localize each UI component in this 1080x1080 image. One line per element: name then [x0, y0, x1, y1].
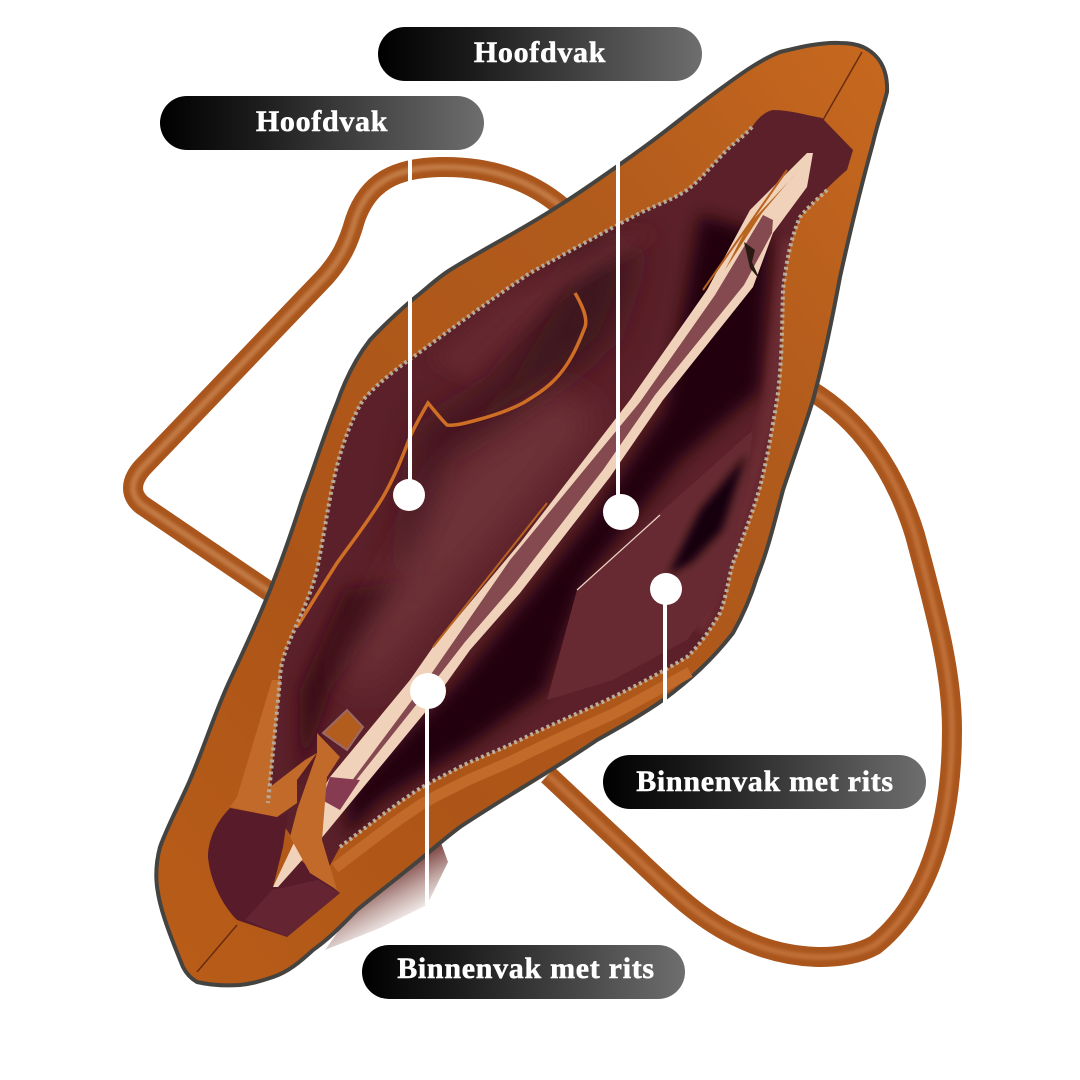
label: Binnenvak met rits bottom	[362, 945, 685, 999]
handle: left strap	[133, 167, 562, 592]
orange zipper tape bottom	[335, 672, 690, 868]
top zipper	[268, 127, 752, 803]
divider pale binding	[273, 153, 813, 887]
divider burgundy recess	[345, 215, 773, 790]
label: Hoofdvak top	[378, 27, 702, 81]
seam bottom left	[197, 925, 237, 972]
burgundy interior	[268, 110, 853, 880]
lining pocket flap	[245, 880, 340, 937]
front panel of the bag	[325, 840, 448, 950]
left pocket orange edge	[297, 293, 586, 627]
label: Binnenvak met rits bottom: Binnenvak met rits	[397, 952, 655, 985]
right zipper	[340, 190, 827, 847]
pointer: bottom zip pocket	[410, 673, 446, 905]
lining pocket bottom left	[208, 808, 340, 937]
pointer: top-centre compartment	[603, 155, 639, 530]
zip end	[322, 777, 360, 810]
orange piping	[433, 170, 787, 647]
pocket pale top edge	[577, 515, 660, 590]
pointer: right zip pocket	[650, 573, 682, 703]
small tab	[323, 710, 363, 750]
right inner zip pocket	[547, 430, 753, 700]
label: Binnenvak met rits right	[603, 755, 926, 809]
zipper tape left	[230, 680, 317, 817]
lining shadows	[300, 215, 790, 835]
zip pull	[744, 242, 760, 280]
label: Hoofdvak left: Hoofdvak	[256, 105, 388, 138]
central divider pocket	[273, 153, 813, 887]
handle: right strap	[548, 390, 952, 957]
lighter lining strip along right zipper	[700, 240, 790, 630]
orange strap loop	[290, 733, 340, 890]
label: Binnenvak met rits right: Binnenvak met rits	[636, 765, 894, 798]
pointer: top-left compartment	[393, 150, 425, 511]
pocket opening shadow	[668, 455, 746, 575]
pocket panel	[547, 430, 753, 700]
seam top right	[823, 52, 862, 120]
divider orange interior	[725, 168, 800, 270]
bag outer shell	[156, 43, 887, 985]
bag body	[156, 43, 887, 985]
label: Hoofdvak top: Hoofdvak	[474, 36, 606, 69]
label: Hoofdvak left	[160, 96, 484, 150]
